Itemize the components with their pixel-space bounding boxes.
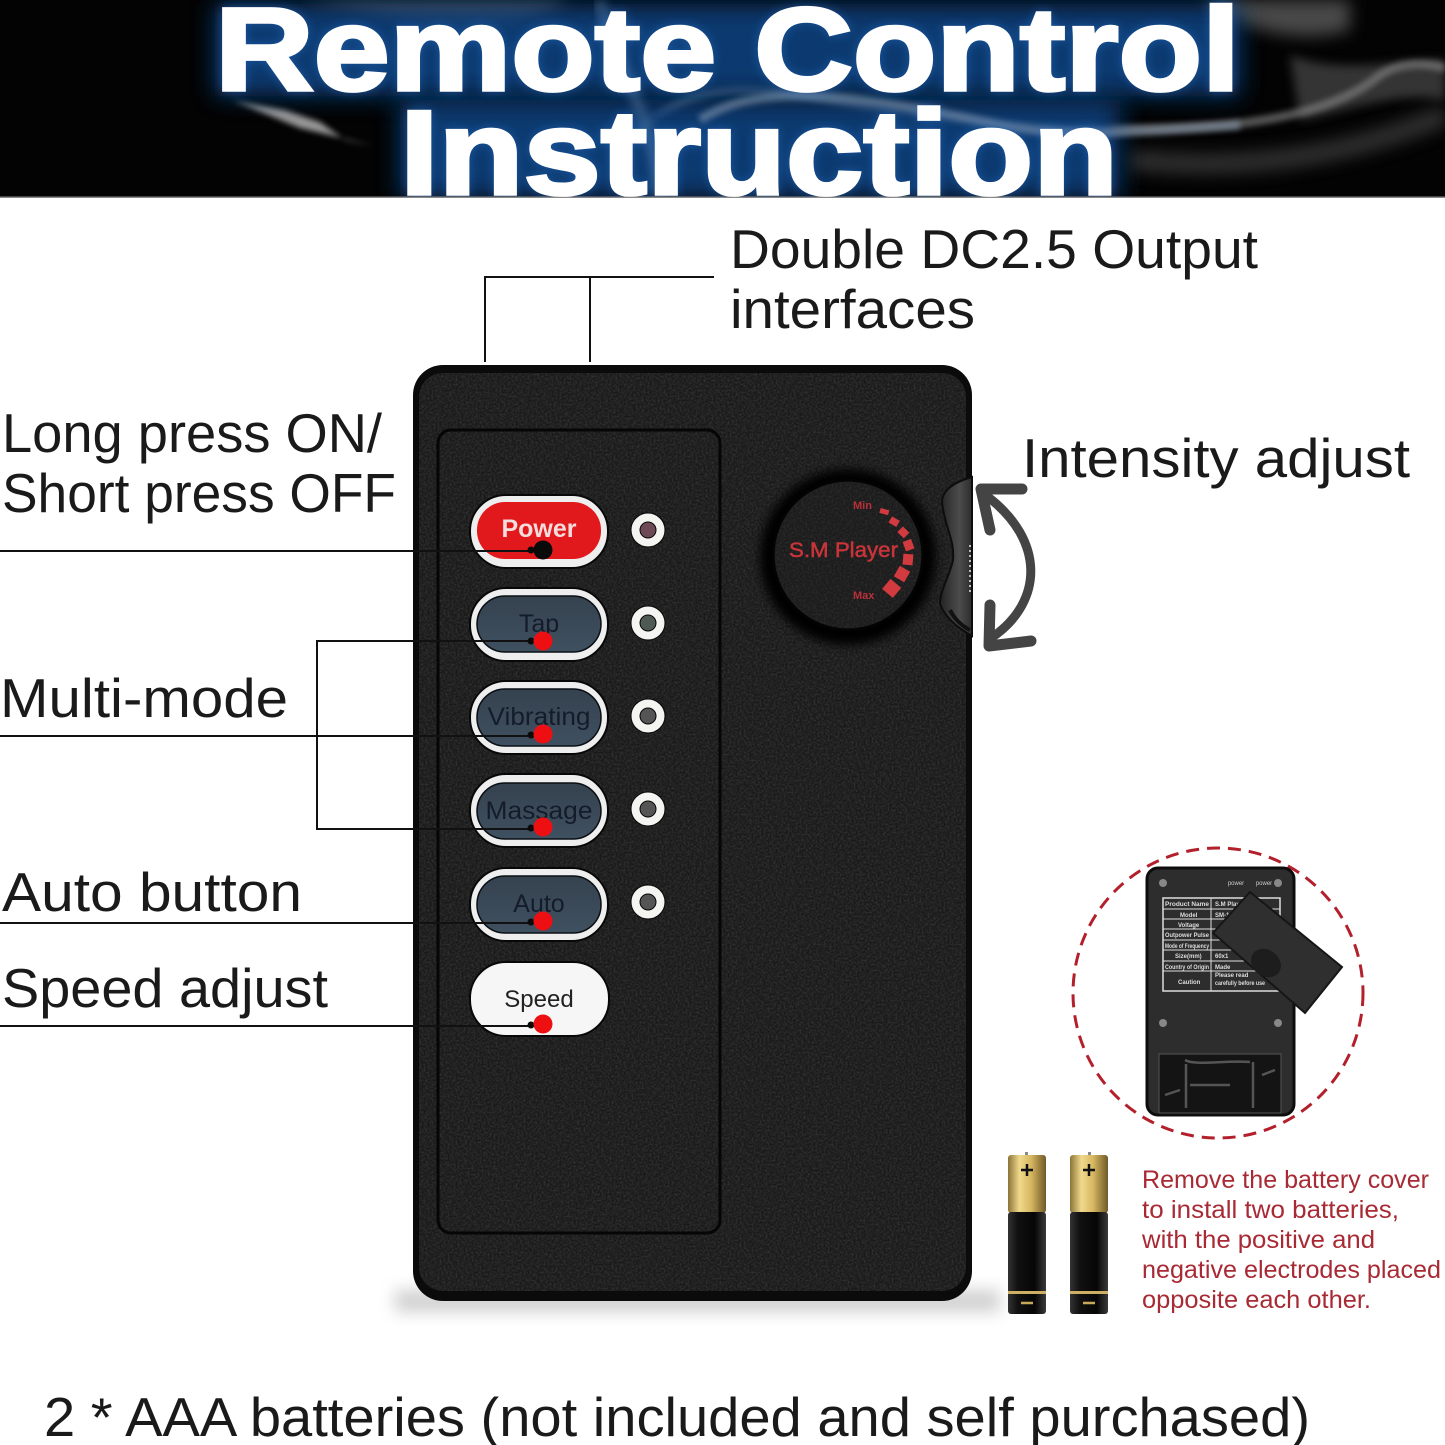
power button	[470, 495, 608, 568]
auto button: Auto	[513, 890, 565, 918]
title	[222, 2, 1232, 197]
auto button	[470, 868, 608, 941]
battery install note	[1141, 1166, 1441, 1314]
tap button: Tap	[519, 610, 559, 638]
intensity knob: Min	[853, 500, 872, 512]
label: speed adjust: Speed adjust	[2, 957, 328, 1019]
battery inset dashed circle	[1073, 848, 1363, 1138]
intensity knob	[760, 469, 936, 645]
header banner	[0, 0, 1445, 220]
vibrating button	[470, 681, 608, 754]
device shadow	[395, 1290, 1000, 1312]
remote back view: Voltage	[1178, 923, 1200, 929]
battery install note: to install two batteries,	[1142, 1196, 1399, 1224]
title: Instruction	[400, 86, 1118, 220]
button panel	[438, 430, 720, 1233]
tap button	[470, 588, 608, 661]
remote back view: carefully before use	[1215, 981, 1266, 987]
remote back view: Model	[1180, 913, 1198, 919]
massage button	[470, 774, 608, 847]
header banner: Instruction	[400, 86, 1118, 220]
label: multi-mode: Multi-mode	[0, 667, 288, 729]
speed button: Speed	[504, 986, 574, 1013]
label: double DC2.5 output	[730, 218, 1258, 340]
label: double DC2.5 output: Double DC2.5 Output	[730, 218, 1258, 280]
remote back view: SM-1	[1215, 913, 1230, 919]
label: intensity adjust: Intensity adjust	[1022, 427, 1410, 489]
intensity knob: Max	[853, 590, 875, 602]
remote control body	[413, 365, 972, 1301]
label: long press on off: Short press OFF	[2, 462, 396, 524]
remote back view: Country of Origin	[1165, 965, 1209, 971]
battery install note: with the positive and	[1141, 1226, 1375, 1254]
leader lines	[0, 277, 714, 1026]
power button: Power	[501, 515, 577, 543]
vibrating button: Vibrating	[488, 703, 590, 731]
remote back view: Mode of Frequency	[1165, 944, 1210, 950]
remote back view: Product Name	[1165, 902, 1210, 908]
rotation arrow	[981, 489, 1031, 646]
remote back view: S.M Player	[1215, 902, 1246, 908]
indicator LEDs	[631, 513, 665, 919]
label: long press on off	[2, 402, 396, 524]
battery install note: negative electrodes placed	[1142, 1256, 1441, 1284]
intensity wheel	[940, 477, 972, 636]
remote back view: Outpower Pulse	[1165, 933, 1210, 939]
speed button	[470, 962, 609, 1036]
remote back view: power	[1228, 881, 1244, 887]
intensity knob: S.M Player	[789, 539, 898, 562]
battery install note: Remove the battery cover	[1142, 1166, 1429, 1194]
batteries	[1008, 1152, 1108, 1314]
remote back view: Caution	[1178, 980, 1201, 986]
label: long press on off: Long press ON/	[2, 402, 383, 464]
remote back view: Please read	[1215, 973, 1249, 979]
label: double DC2.5 output: interfaces	[730, 278, 975, 340]
remote back view	[1147, 868, 1294, 1115]
remote back view: Size(mm)	[1175, 954, 1202, 960]
massage button: Massage	[486, 797, 592, 825]
leader dots	[528, 540, 552, 1034]
remote back view: 60x1	[1215, 954, 1229, 960]
battery install note: opposite each other.	[1142, 1286, 1371, 1314]
label: auto button: Auto button	[2, 861, 302, 923]
battery cover	[1213, 892, 1342, 1013]
remote back view: power	[1256, 881, 1272, 887]
remote back view: Made	[1215, 965, 1231, 971]
